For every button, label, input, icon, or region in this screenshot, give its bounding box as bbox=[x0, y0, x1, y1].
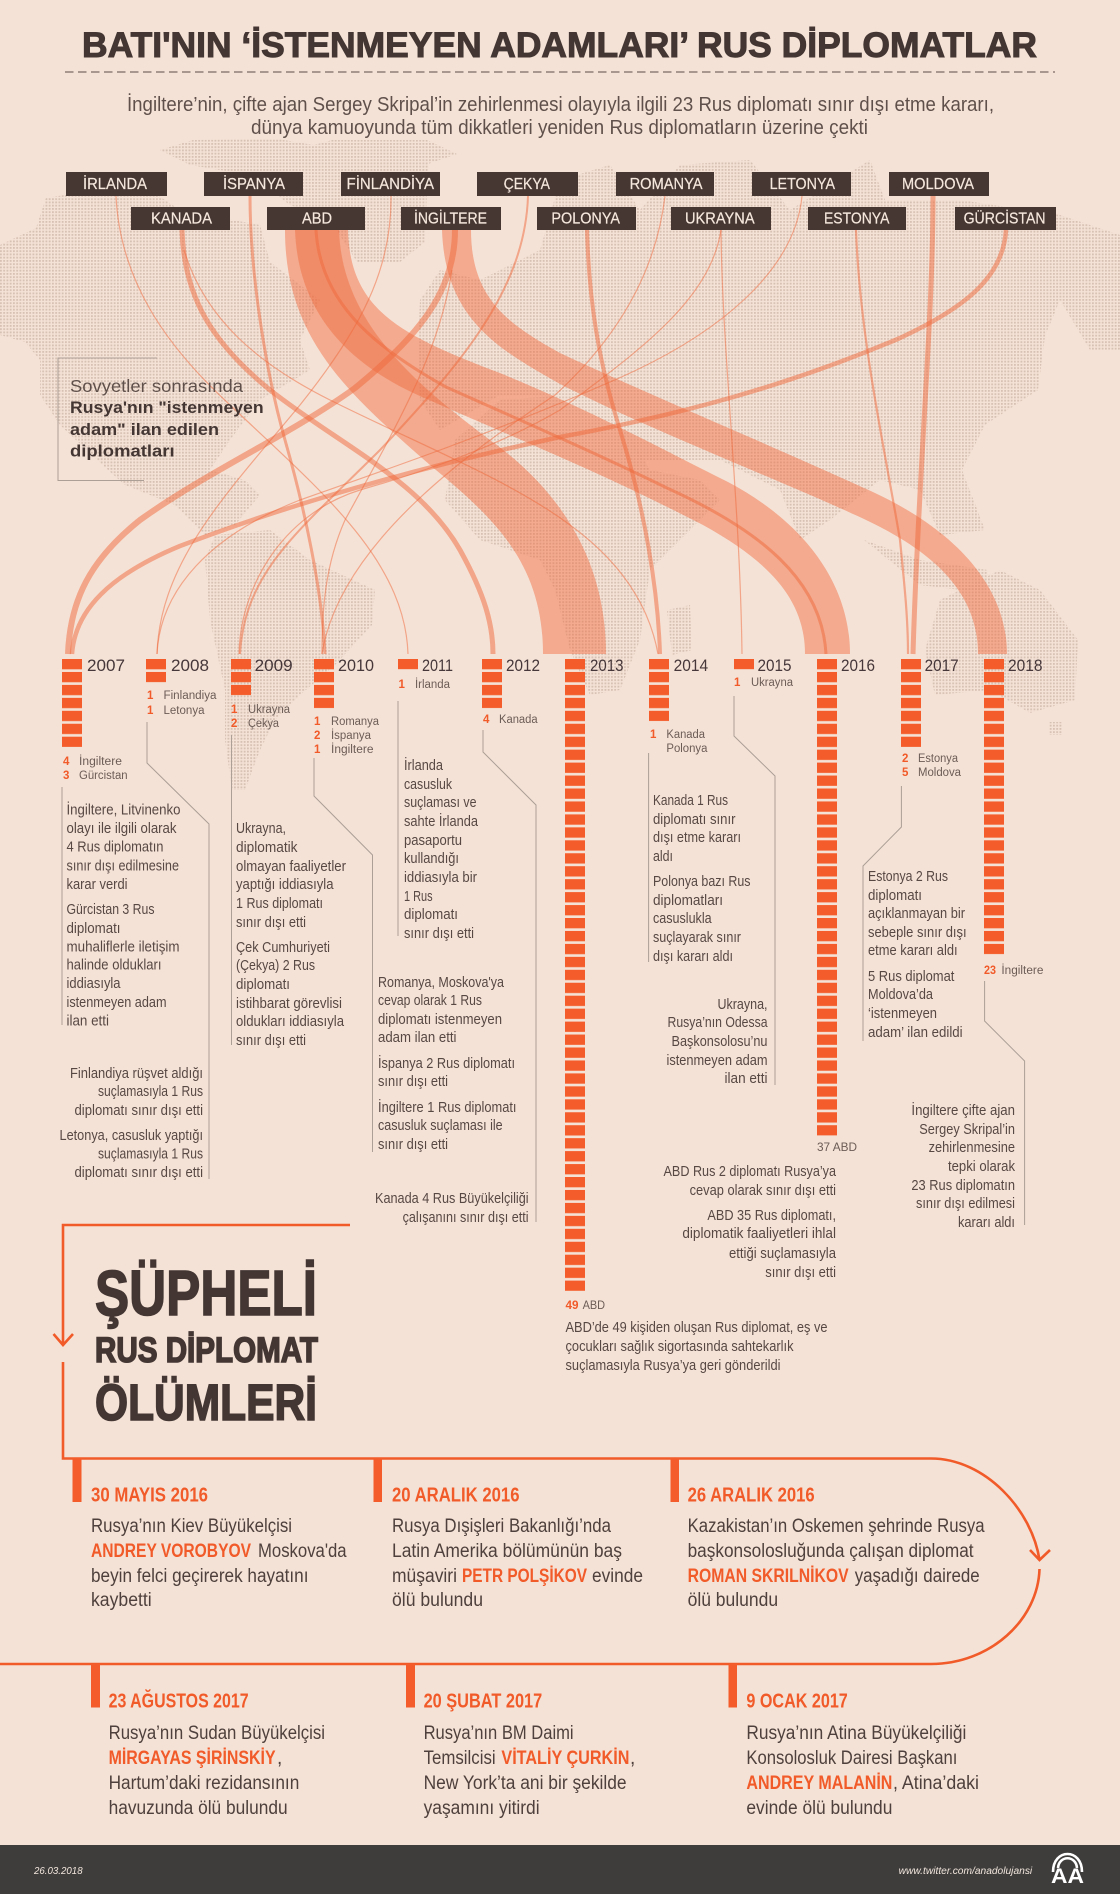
legend 2011 bbox=[398, 678, 451, 691]
death: Polşikov: ölü bulundu bbox=[392, 1590, 483, 1611]
note 2013: suçlamasıyla Rusya’ya geri gönderildi bbox=[566, 1358, 780, 1374]
note 2013: ABD’de 49 kişiden oluşan Rus diplomat, eş ve bbox=[566, 1320, 828, 1336]
country labels: İNGİLTERE bbox=[414, 209, 487, 227]
death: Skrilnikov: ölü bulundu bbox=[688, 1590, 778, 1611]
death: Çurkin: VİTALİY ÇURKİN bbox=[501, 1748, 629, 1769]
heading: suspicious deaths: ÖLÜMLERİ bbox=[95, 1374, 317, 1431]
note 2007: 4 Rus diplomatın bbox=[66, 840, 164, 856]
note 2011: iddiasıyla bir bbox=[404, 870, 477, 886]
death: Vorobyov: 30 MAYIS 2016 bbox=[91, 1485, 208, 1507]
note 2010 bbox=[378, 975, 516, 1153]
note 2018: Sergey Skripal’in bbox=[919, 1122, 1015, 1138]
note 2009: istihbarat görevlisi bbox=[236, 996, 342, 1012]
footer: www.twitter.com/anadolujansi bbox=[899, 1866, 1033, 1877]
legend 2014 bbox=[650, 729, 708, 755]
death: Skrilnikov: ROMAN SKRILNİKOV bbox=[688, 1566, 849, 1587]
note 2007: diplomatı bbox=[66, 921, 120, 937]
subtitle: İngiltere’nin, çifte ajan Sergey Skripal’in zehirlenmesi olayıyla ilgili 23 Rus diplomatı sınır dışı etme kararı, bbox=[127, 93, 994, 116]
note 2007 bbox=[66, 800, 180, 1030]
note 2010: diplomatı istenmeyen bbox=[378, 1012, 502, 1028]
note 2008: Letonya, casusluk yaptığı bbox=[60, 1128, 203, 1144]
year 2010: 2010 bbox=[338, 656, 374, 675]
ribbon: İngiltere to 2018 bbox=[442, 230, 1007, 654]
note 2016: cevap olarak sınır dışı etti bbox=[690, 1183, 836, 1199]
legend 2009: 1 bbox=[231, 704, 238, 716]
year 2011: 2011 bbox=[422, 656, 453, 675]
note 2012: çalışanını sınır dışı etti bbox=[403, 1210, 529, 1226]
death: Skrilnikov: başkonsolosluğunda çalışan diplomat bbox=[688, 1541, 974, 1562]
note 2016: diplomatik faaliyetleri ihlal bbox=[682, 1226, 836, 1242]
note 2007: ilan etti bbox=[66, 1014, 109, 1030]
intro box: adam" ilan edilen bbox=[70, 421, 219, 439]
note 2008: suçlamasıyla 1 Rus bbox=[98, 1147, 203, 1163]
heading: suspicious deaths: RUS DİPLOMAT bbox=[95, 1331, 318, 1370]
legend 2008: 1 bbox=[147, 690, 154, 702]
death: Polşikov: Latin Amerika bölümünün baş bbox=[392, 1541, 622, 1562]
death: Çurkin: 20 ŞUBAT 2017 bbox=[424, 1691, 542, 1713]
bar 2016 bbox=[817, 659, 837, 1136]
death: Şirinskiy bbox=[91, 1664, 325, 1819]
note 2016: ABD Rus 2 diplomatı Rusya’ya bbox=[664, 1164, 837, 1180]
note 2017: diplomatı bbox=[868, 888, 922, 904]
note 2015: Ukrayna, bbox=[718, 997, 768, 1013]
country labels: ESTONYA bbox=[824, 210, 890, 227]
note 2008: diplomatı sınır dışı etti bbox=[74, 1103, 203, 1119]
note 2010: sınır dışı etti bbox=[378, 1137, 448, 1153]
country labels: FİNLANDİYA bbox=[346, 175, 435, 193]
death: Polşikov: Rusya Dışişleri Bakanlığı’nda bbox=[392, 1516, 611, 1537]
note 2007: İngiltere, Litvinenko bbox=[66, 800, 180, 818]
legend 2010 bbox=[314, 716, 380, 756]
legend 2008: 1 bbox=[147, 705, 154, 717]
subtitle: dünya kamuoyunda tüm dikkatleri yeniden Rus diplomatların üzerine çekti bbox=[251, 117, 868, 139]
note 2009: sınır dışı etti bbox=[236, 1033, 306, 1049]
flow ribbons: countries to years bbox=[68, 196, 1007, 654]
year 2008: 2008 bbox=[171, 656, 209, 675]
note 2015: Rusya’nın Odessa bbox=[668, 1015, 768, 1031]
legend 2013 bbox=[566, 1300, 605, 1312]
note 2008: Finlandiya rüşvet aldığı bbox=[70, 1066, 203, 1082]
legend 2012: Kanada bbox=[499, 714, 538, 726]
note 2011: 1 Rus bbox=[404, 889, 433, 905]
death: Çurkin: Rusya’nın BM Daimi bbox=[424, 1723, 574, 1744]
bar 2011 bbox=[398, 659, 418, 669]
legend 2009 bbox=[231, 704, 291, 730]
legend 2008: Finlandiya bbox=[164, 690, 217, 702]
intro box: diplomatları bbox=[70, 442, 175, 460]
year 2011 bbox=[398, 656, 479, 942]
note 2010: casusluk suçlaması ile bbox=[378, 1118, 503, 1134]
note 2014: diplomatları bbox=[653, 893, 723, 909]
legend 2007: İngiltere bbox=[79, 755, 122, 768]
country labels bbox=[66, 172, 1056, 230]
year 2015: 2015 bbox=[758, 656, 792, 675]
death: Çurkin: Temsilcisi bbox=[424, 1748, 496, 1769]
note 2015 bbox=[666, 997, 768, 1087]
legend 2010: Romanya bbox=[331, 716, 380, 728]
death: Çurkin: yaşamını yitirdi bbox=[424, 1798, 540, 1819]
note 2007: Gürcistan 3 Rus bbox=[66, 902, 154, 918]
year 2012: 2012 bbox=[506, 656, 540, 675]
note 2013 bbox=[566, 1320, 828, 1374]
year 2018 bbox=[911, 656, 1043, 1231]
death: Vorobyov: Moskova'da bbox=[258, 1541, 347, 1562]
note 2010: İspanya 2 Rus diplomatı bbox=[378, 1054, 515, 1072]
bar 2010 bbox=[314, 659, 334, 708]
note 2007: karar verdi bbox=[66, 877, 128, 893]
note 2010: İngiltere 1 Rus diplomatı bbox=[378, 1098, 516, 1116]
country labels: İSPANYA bbox=[223, 175, 286, 193]
year 2018: 2018 bbox=[1008, 656, 1042, 675]
note 2016 bbox=[664, 1164, 837, 1281]
legend 2017: 5 bbox=[902, 767, 909, 779]
country labels: KANADA bbox=[151, 210, 213, 227]
note 2008: suçlamasıyla 1 Rus bbox=[98, 1084, 203, 1100]
note 2017: Estonya 2 Rus bbox=[868, 869, 948, 885]
note 2008: diplomatı sınır dışı etti bbox=[74, 1165, 203, 1181]
note 2018: İngiltere çifte ajan bbox=[911, 1101, 1015, 1119]
ribbon: ABD to 2013 bbox=[285, 230, 606, 654]
note 2017: adam’ ilan edildi bbox=[868, 1025, 963, 1041]
year 2010 bbox=[314, 656, 516, 1153]
death: Polşikov: 20 ARALIK 2016 bbox=[392, 1485, 520, 1507]
country labels: ÇEKYA bbox=[504, 176, 551, 193]
death: Polşikov bbox=[374, 1458, 643, 1611]
note 2009: sınır dışı etti bbox=[236, 915, 306, 931]
note 2011 bbox=[404, 756, 479, 942]
legend 2017: Moldova bbox=[918, 767, 962, 779]
country labels: GÜRCİSTAN bbox=[964, 209, 1046, 227]
note 2011: casusluk bbox=[404, 777, 453, 793]
note 2011: sınır dışı etti bbox=[404, 926, 474, 942]
legend 2011: İrlanda bbox=[415, 678, 451, 691]
note 2007: muhaliflerle iletişim bbox=[66, 940, 180, 956]
legend 2011: 1 bbox=[398, 679, 406, 691]
year 2008 bbox=[60, 656, 217, 1181]
legend 2018: İngiltere bbox=[1001, 964, 1043, 977]
note 2017: sebeple sınır dışı bbox=[868, 925, 967, 941]
country labels: MOLDOVA bbox=[902, 176, 975, 193]
note 2009: yaptığı iddiasıyla bbox=[236, 877, 334, 893]
death: Skrilnikov: yaşadığı dairede bbox=[855, 1566, 980, 1587]
footer bbox=[0, 1845, 1120, 1894]
legend 2007: 3 bbox=[63, 770, 69, 782]
note 2007: halinde oldukları bbox=[66, 958, 162, 974]
note 2017: ‘istenmeyen bbox=[868, 1006, 937, 1022]
note 2016: ettiği suçlamasıyla bbox=[729, 1246, 837, 1262]
legend 2009: 2 bbox=[231, 718, 237, 730]
death: Malanin: 9 OCAK 2017 bbox=[746, 1691, 848, 1713]
country labels: UKRAYNA bbox=[685, 210, 755, 227]
year 2013: 2013 bbox=[590, 656, 624, 675]
note 2009: Ukrayna, bbox=[236, 821, 286, 837]
note 2011: pasaportu bbox=[404, 833, 462, 849]
bar 2015 bbox=[734, 659, 754, 669]
death: Malanin bbox=[728, 1664, 979, 1819]
note 2009: Çek Cumhuriyeti bbox=[236, 940, 330, 956]
note 2011: diplomatı bbox=[404, 907, 458, 923]
note 2008 bbox=[60, 1066, 203, 1181]
subtitle bbox=[127, 93, 994, 139]
note 2017: etme kararı aldı bbox=[868, 943, 958, 959]
year 2009 bbox=[231, 656, 346, 1049]
year 2014 bbox=[649, 656, 750, 965]
heading: suspicious deaths: ŞÜPHELİ bbox=[95, 1257, 317, 1329]
note 2010: sınır dışı etti bbox=[378, 1074, 448, 1090]
note 2009: diplomatı bbox=[236, 977, 290, 993]
intro box bbox=[58, 358, 264, 480]
timeline frame and arrows bbox=[0, 1225, 1050, 1664]
year 2015 bbox=[666, 656, 794, 1087]
note 2009: (Çekya) 2 Rus bbox=[236, 958, 315, 974]
note 2011: İrlanda bbox=[404, 756, 444, 774]
bar 2009 bbox=[231, 659, 251, 695]
death: Malanin: evinde ölü bulundu bbox=[746, 1798, 892, 1819]
thin flow lines bbox=[68, 196, 1006, 654]
note 2014: Kanada 1 Rus bbox=[653, 793, 728, 809]
note 2011: kullandığı bbox=[404, 851, 459, 867]
note 2016: ABD 35 Rus diplomatı, bbox=[707, 1208, 836, 1224]
legend 2017: Estonya bbox=[918, 753, 959, 765]
dotted world map bbox=[0, 139, 1120, 790]
note 2010: cevap olarak 1 Rus bbox=[378, 993, 482, 1009]
note 2014: aldı bbox=[653, 849, 673, 865]
icon: Anadolu Agency logo: AA bbox=[1051, 1865, 1084, 1888]
bar 2013 bbox=[565, 659, 585, 1291]
note 2014: dışı kararı aldı bbox=[653, 949, 733, 965]
legend 2008: Letonya bbox=[164, 705, 205, 717]
note 2014: casuslukla bbox=[653, 911, 712, 927]
country labels: LETONYA bbox=[770, 176, 836, 193]
death: Çurkin: , bbox=[630, 1748, 635, 1769]
note 2018: 23 Rus diplomatın bbox=[911, 1178, 1015, 1194]
title: BATI'NIN ‘İSTENMEYEN ADAMLARI’ RUS DİPLOMATLAR bbox=[82, 26, 1037, 65]
death: Skrilnikov: 26 ARALIK 2016 bbox=[688, 1485, 815, 1507]
legend 2012: 4 bbox=[483, 714, 490, 726]
year 2014: 2014 bbox=[674, 656, 708, 675]
year 2009: 2009 bbox=[255, 656, 293, 675]
country labels: İRLANDA bbox=[83, 175, 148, 193]
year 2012 bbox=[375, 656, 540, 1226]
bar 2008 bbox=[146, 659, 166, 682]
legend 2018: 23 bbox=[984, 965, 996, 977]
note 2014: dışı etme kararı bbox=[653, 830, 741, 846]
bar 2017 bbox=[901, 659, 921, 747]
note 2011: sahte İrlanda bbox=[404, 812, 479, 830]
legend 2010: 2 bbox=[314, 730, 320, 742]
legend 2013: ABD bbox=[583, 1300, 605, 1312]
note 2014: suçlayarak sınır bbox=[653, 930, 741, 946]
bar 2012 bbox=[482, 659, 502, 708]
death: Malanin: Rusya’nın Atina Büyükelçiliği bbox=[746, 1723, 966, 1744]
death: Vorobyov: Rusya’nın Kiev Büyükelçisi bbox=[91, 1516, 292, 1537]
death: Şirinskiy: MİRGAYAS ŞİRİNSKİY bbox=[109, 1748, 276, 1769]
legend 2010: 1 bbox=[314, 716, 321, 728]
death: Malanin: ANDREY MALANİN bbox=[746, 1773, 892, 1794]
note 2014 bbox=[653, 793, 750, 965]
year 2007: 2007 bbox=[87, 656, 125, 675]
note 2015: istenmeyen adam bbox=[666, 1053, 768, 1069]
legend 2010: İspanya bbox=[331, 729, 372, 742]
year 2017: 2017 bbox=[925, 656, 959, 675]
note 2009: 1 Rus diplomatı bbox=[236, 896, 323, 912]
icon: Anadolu Agency logo bbox=[1051, 1854, 1084, 1888]
country labels: ROMANYA bbox=[630, 176, 703, 193]
note 2009: oldukları iddiasıyla bbox=[236, 1014, 345, 1030]
legend 2007: Gürcistan bbox=[79, 770, 128, 782]
note 2011: suçlaması ve bbox=[404, 795, 476, 811]
note 2017: Moldova’da bbox=[868, 987, 934, 1003]
note 2014: diplomatı sınır bbox=[653, 812, 736, 828]
bar 2018 bbox=[984, 659, 1004, 954]
note 2018: tepki olarak bbox=[948, 1159, 1016, 1175]
note 2017 bbox=[868, 869, 967, 1041]
death: Şirinskiy: Rusya’nın Sudan Büyükelçisi bbox=[109, 1723, 325, 1744]
year 2013 bbox=[565, 656, 828, 1374]
note 2017: 5 Rus diplomat bbox=[868, 969, 954, 985]
legend 2007: 4 bbox=[63, 756, 70, 768]
legend 2009: Ukrayna bbox=[248, 704, 291, 716]
note 2007: istenmeyen adam bbox=[66, 995, 166, 1011]
death: Polşikov: müşaviri bbox=[392, 1566, 457, 1587]
legend 2010: İngiltere bbox=[331, 743, 374, 756]
death: Skrilnikov bbox=[670, 1458, 985, 1611]
legend 2014: Polonya bbox=[666, 743, 708, 755]
note 2012 bbox=[375, 1191, 529, 1226]
death: Skrilnikov: Kazakistan’ın Oskemen şehrinde Rusya bbox=[688, 1516, 985, 1537]
year 2016 bbox=[664, 656, 875, 1281]
intro box: Sovyetler sonrasında bbox=[70, 376, 243, 396]
note 2018: kararı aldı bbox=[958, 1215, 1015, 1231]
legend 2014: Kanada bbox=[666, 729, 706, 741]
year 2007 bbox=[62, 656, 180, 1030]
note 2017: açıklanmayan bir bbox=[868, 906, 965, 922]
legend 2007 bbox=[63, 755, 128, 782]
year 2017 bbox=[863, 656, 967, 1041]
legend 2017: 2 bbox=[902, 753, 908, 765]
note 2010: Romanya, Moskova'ya bbox=[378, 975, 505, 991]
death: Malanin: , Atina’daki bbox=[893, 1773, 979, 1794]
year 2016: 2016 bbox=[841, 656, 875, 675]
note 2007: olayı ile ilgili olarak bbox=[66, 821, 177, 837]
heading: suspicious deaths bbox=[95, 1257, 318, 1431]
note 2015: ilan etti bbox=[724, 1071, 768, 1087]
legend 2018 bbox=[984, 964, 1043, 977]
death: Şirinskiy: , bbox=[277, 1748, 282, 1769]
note 2009 bbox=[236, 821, 346, 1049]
legend 2015: 1 bbox=[734, 677, 741, 689]
death: Vorobyov: kaybetti bbox=[91, 1590, 152, 1611]
note 2007: sınır dışı edilmesine bbox=[66, 858, 179, 874]
legend 2008 bbox=[147, 690, 217, 717]
footer: 26.03.2018 bbox=[33, 1866, 83, 1877]
ribbon: ABD to 2016 bbox=[295, 230, 850, 654]
country labels: ABD bbox=[302, 210, 332, 227]
note 2018: zehirlenmesine bbox=[929, 1140, 1015, 1156]
note 2013: çocukları sağlık sigortasında sahtekarlık bbox=[566, 1339, 794, 1355]
note 2010: adam ilan etti bbox=[378, 1030, 456, 1046]
legend 2010: 1 bbox=[314, 744, 321, 756]
bar 2007 bbox=[62, 659, 82, 747]
death: Vorobyov bbox=[72, 1458, 347, 1611]
legend 2009: Çekya bbox=[248, 718, 280, 730]
death: Çurkin: New York’ta ani bir şekilde bbox=[424, 1773, 627, 1794]
country labels: POLONYA bbox=[551, 210, 621, 227]
death: Şirinskiy: havuzunda ölü bulundu bbox=[109, 1798, 288, 1819]
note 2018 bbox=[911, 1101, 1016, 1231]
death: Vorobyov: ANDREY VOROBYOV bbox=[91, 1541, 251, 1562]
death: Malanin: Konsolosluk Dairesi Başkanı bbox=[746, 1748, 957, 1769]
legend 2017 bbox=[902, 753, 962, 779]
death: Polşikov: PETR POLŞİKOV bbox=[462, 1566, 587, 1587]
death: Vorobyov: beyin felci geçirerek hayatını bbox=[91, 1566, 308, 1587]
death: Polşikov: evinde bbox=[592, 1566, 643, 1587]
death: Şirinskiy: 23 AĞUSTOS 2017 bbox=[109, 1689, 249, 1713]
legend 2013: 49 bbox=[566, 1300, 578, 1312]
note 2015: Başkonsolosu’nu bbox=[672, 1034, 768, 1050]
bar 2014 bbox=[649, 659, 669, 721]
legend 2015: Ukrayna bbox=[751, 677, 794, 689]
note 2016: sınır dışı etti bbox=[765, 1265, 836, 1281]
note 2009: diplomatik bbox=[236, 840, 298, 856]
note 2012: Kanada 4 Rus Büyükelçiliği bbox=[375, 1191, 529, 1207]
note 2014: Polonya bazı Rus bbox=[653, 874, 750, 890]
death: Çurkin bbox=[406, 1664, 635, 1819]
legend 2016: 37 ABD bbox=[817, 1142, 857, 1154]
intro box: Rusya'nın "istenmeyen bbox=[70, 399, 264, 417]
legend 2014: 1 bbox=[650, 729, 657, 741]
death: Şirinskiy: Hartum’daki rezidansının bbox=[109, 1773, 299, 1794]
note 2018: sınır dışı edilmesi bbox=[916, 1196, 1015, 1212]
note 2009: olmayan faaliyetler bbox=[236, 859, 346, 875]
note 2007: iddiasıyla bbox=[66, 976, 121, 992]
